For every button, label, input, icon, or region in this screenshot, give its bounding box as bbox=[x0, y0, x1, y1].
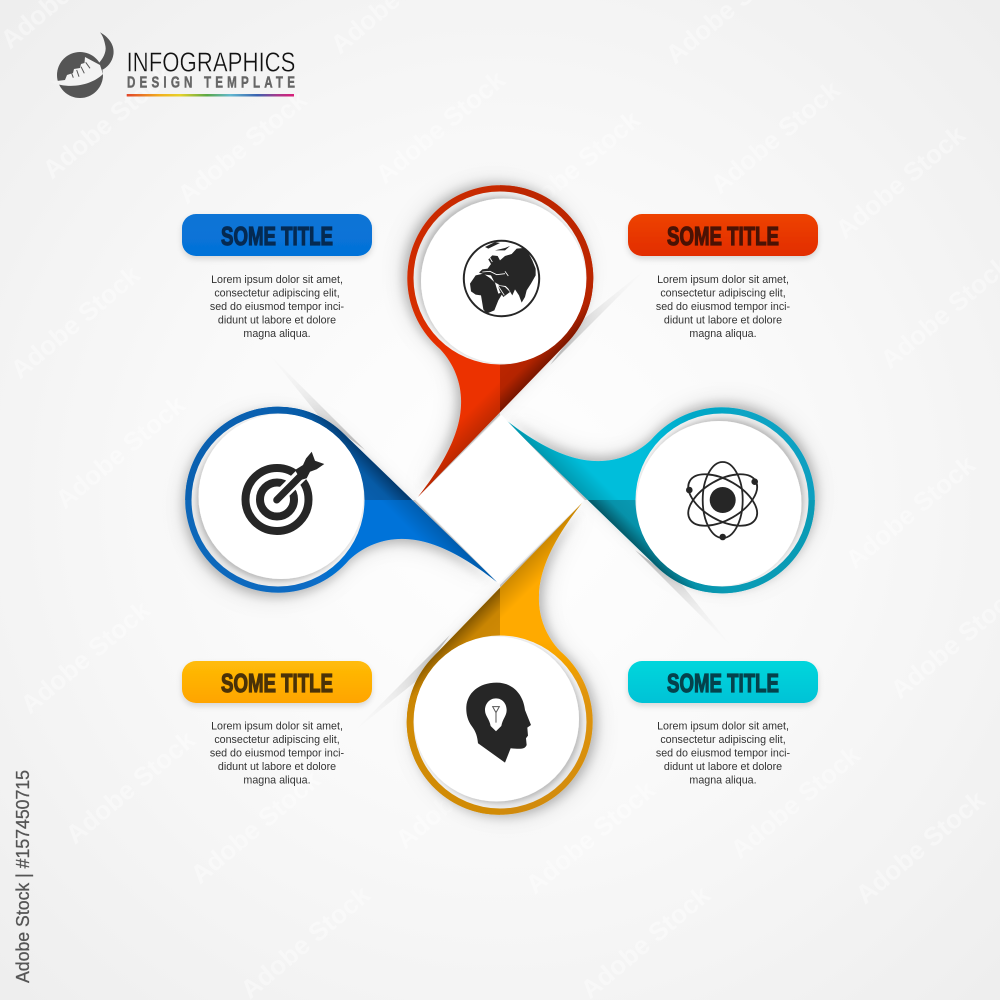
description: magna aliqua. bbox=[243, 328, 311, 340]
logo title: INFOGRAPHICS bbox=[126, 47, 296, 78]
description: sed do eiusmod tempor inci- bbox=[656, 748, 791, 760]
stock watermark: Adobe Stock bbox=[705, 74, 846, 200]
description: consectetur adipiscing elit, bbox=[660, 288, 786, 300]
heading: SOME TITLE bbox=[667, 221, 779, 251]
inner recess bbox=[414, 192, 586, 364]
pill bbox=[628, 214, 818, 256]
stock watermark: Adobe Stock bbox=[15, 594, 156, 720]
icon: head with light bulb bbox=[466, 683, 531, 763]
logo mark bbox=[50, 32, 114, 98]
fold shadow bbox=[550, 267, 648, 365]
icon: atom bbox=[680, 462, 766, 540]
pin dark half bbox=[406, 588, 500, 815]
description: sed do eiusmod tempor inci- bbox=[656, 301, 791, 313]
stock watermark: Adobe Stock bbox=[505, 104, 646, 230]
description: consectetur adipiscing elit, bbox=[660, 734, 786, 746]
heading: SOME TITLE bbox=[221, 668, 333, 698]
description: didunt ut labore et dolore bbox=[664, 314, 782, 326]
card: yellow title bbox=[182, 661, 372, 786]
description: sed do eiusmod tempor inci- bbox=[210, 301, 345, 313]
pin body bbox=[407, 185, 593, 497]
tip shading bbox=[418, 380, 500, 497]
icon: globe bbox=[464, 241, 539, 316]
description: Lorem ipsum dolor sit amet, bbox=[657, 720, 789, 732]
description: magna aliqua. bbox=[689, 328, 757, 340]
stock watermark: Adobe Stock bbox=[725, 739, 866, 865]
panel: red pin top bbox=[407, 185, 648, 497]
logo subtitle: DESIGN TEMPLATE bbox=[127, 74, 295, 91]
description: didunt ut labore et dolore bbox=[664, 761, 782, 773]
white disc bbox=[421, 198, 586, 364]
pill bbox=[628, 661, 818, 703]
panel: orange pin bottom bbox=[352, 503, 593, 815]
stock watermark: Adobe Stock bbox=[5, 259, 146, 385]
white disc bbox=[414, 636, 579, 802]
stock watermark: Adobe Stock bbox=[60, 724, 201, 850]
centre white square bbox=[416, 415, 584, 584]
description: didunt ut labore et dolore bbox=[218, 314, 336, 326]
inner recess bbox=[414, 636, 586, 808]
description: Lorem ipsum dolor sit amet, bbox=[211, 274, 343, 286]
tip shading bbox=[380, 500, 497, 582]
stock watermark: Adobe Stock bbox=[172, 84, 313, 210]
pin body bbox=[407, 503, 593, 815]
card: blue title bbox=[182, 214, 372, 340]
fold shadow bbox=[267, 352, 365, 450]
pin dark half bbox=[185, 406, 412, 500]
heading: SOME TITLE bbox=[221, 221, 333, 251]
stock watermark: Adobe Stock bbox=[370, 64, 511, 190]
pin body bbox=[185, 407, 497, 593]
white disc bbox=[198, 414, 364, 579]
stock watermark: Adobe Stock bbox=[37, 59, 178, 185]
pin dark half bbox=[500, 185, 594, 412]
heading: SOME TITLE bbox=[667, 668, 779, 698]
stock watermark: Adobe Stock bbox=[520, 774, 661, 900]
description: magna aliqua. bbox=[243, 774, 311, 786]
panel: blue pin left bbox=[185, 352, 497, 593]
stock id caption: Adobe Stock | #157450715 bbox=[13, 770, 33, 983]
inner recess bbox=[636, 414, 808, 586]
fold shadow bbox=[635, 550, 733, 648]
stock watermark: Adobe Stock bbox=[390, 729, 531, 855]
description: sed do eiusmod tempor inci- bbox=[210, 748, 345, 760]
card: red title bbox=[628, 214, 818, 340]
logo bbox=[50, 32, 296, 98]
description: magna aliqua. bbox=[689, 774, 757, 786]
stock watermark: Adobe Stock bbox=[830, 119, 971, 245]
white disc bbox=[636, 421, 802, 586]
description: Lorem ipsum dolor sit amet, bbox=[211, 720, 343, 732]
stock watermark: Adobe Stock bbox=[185, 764, 326, 890]
tip shading bbox=[509, 422, 613, 500]
tip shading bbox=[500, 503, 582, 620]
pill bbox=[182, 214, 372, 256]
fold shadow bbox=[352, 635, 450, 733]
description: consectetur adipiscing elit, bbox=[214, 288, 340, 300]
description: consectetur adipiscing elit, bbox=[214, 734, 340, 746]
description: Lorem ipsum dolor sit amet, bbox=[657, 274, 789, 286]
icon: target with arrow bbox=[246, 452, 324, 531]
pin body bbox=[503, 407, 815, 593]
stock watermark: Adobe Stock bbox=[850, 784, 991, 910]
description: didunt ut labore et dolore bbox=[218, 761, 336, 773]
panel: teal pin right bbox=[503, 407, 815, 648]
pill bbox=[182, 661, 372, 703]
inner recess bbox=[192, 414, 364, 586]
stock watermark: Adobe Stock bbox=[840, 449, 981, 575]
card: teal title bbox=[628, 661, 818, 786]
rainbow rule bbox=[127, 94, 294, 96]
stock watermark: Adobe Stock bbox=[50, 389, 191, 515]
pin dark half bbox=[588, 500, 815, 594]
